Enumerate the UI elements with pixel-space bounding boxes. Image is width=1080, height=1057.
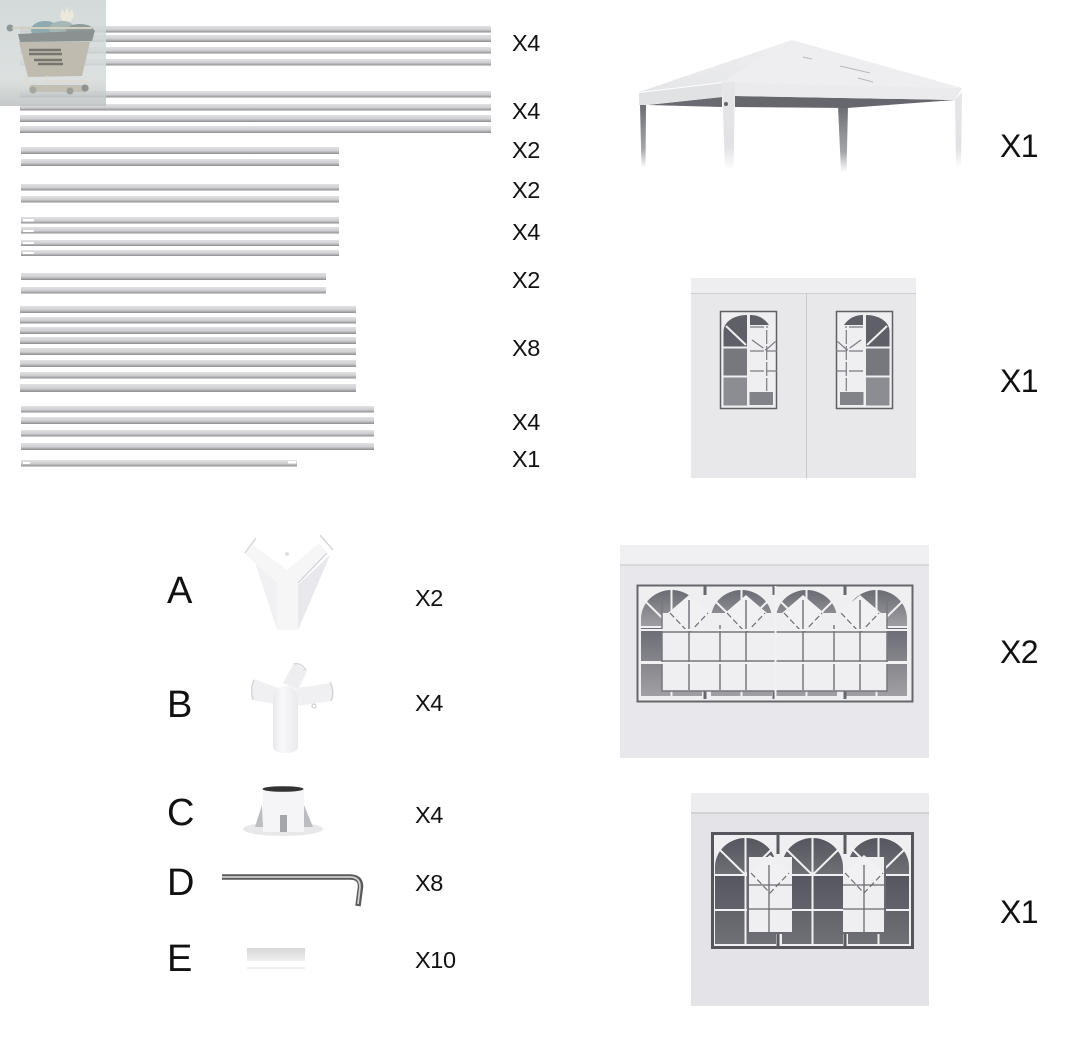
rod quantity labels: X4 — [512, 98, 540, 124]
canopy quantity: X1 — [1000, 128, 1038, 164]
rod quantity labels: X4 — [512, 30, 540, 56]
rod quantity labels: X1 — [512, 446, 540, 472]
rods: group 7, eight rods x8 — [20, 306, 356, 392]
connector D: hex key — [222, 877, 361, 906]
short side wall quantity: X1 — [1000, 894, 1038, 930]
quantity E: X10 — [415, 947, 456, 973]
rod quantity labels — [512, 30, 540, 472]
quantity B: X4 — [415, 690, 443, 716]
quantity C: X4 — [415, 802, 443, 828]
letter A label: A — [167, 570, 193, 612]
rod quantity labels: X2 — [512, 267, 540, 293]
short side wall with three windows — [691, 793, 929, 1006]
rods: group 6, two rods x2 — [21, 273, 326, 294]
rods: group 4, two rods x2 — [21, 184, 339, 202]
connector B — [252, 663, 333, 753]
rods: group 2, four long rods x4 — [20, 91, 491, 133]
letter B label: B — [167, 684, 192, 726]
canopy roof with legs — [639, 40, 962, 172]
door panel with two windows — [691, 278, 916, 478]
letter E label: E — [167, 938, 192, 980]
long side wall quantity: X2 — [1000, 634, 1038, 670]
rods: group 5, four rods x4 with slots — [21, 217, 339, 256]
connector C — [243, 786, 323, 836]
connector E: coupler — [247, 948, 305, 969]
rods: group 9, single rod x1 — [21, 460, 297, 466]
rods: group 3, two rods x2 — [21, 147, 339, 166]
rod quantity labels: X4 — [512, 409, 540, 435]
rod quantity labels: X2 — [512, 137, 540, 163]
rod quantity labels: X4 — [512, 219, 540, 245]
letter C label: C — [167, 792, 194, 834]
rods: group 8, four rods x4 — [21, 406, 374, 450]
rod quantity labels: X2 — [512, 177, 540, 203]
letter D label: D — [167, 862, 194, 904]
rod quantity labels: X8 — [512, 335, 540, 361]
long side wall with four windows — [620, 545, 929, 758]
rods: group 1, four long rods x4 — [20, 26, 491, 66]
quantity D: X8 — [415, 870, 443, 896]
connector A — [245, 535, 333, 630]
quantity A: X2 — [415, 585, 443, 611]
door panel quantity: X1 — [1000, 363, 1038, 399]
thumbnail: shopping cart with crown — [0, 0, 106, 106]
